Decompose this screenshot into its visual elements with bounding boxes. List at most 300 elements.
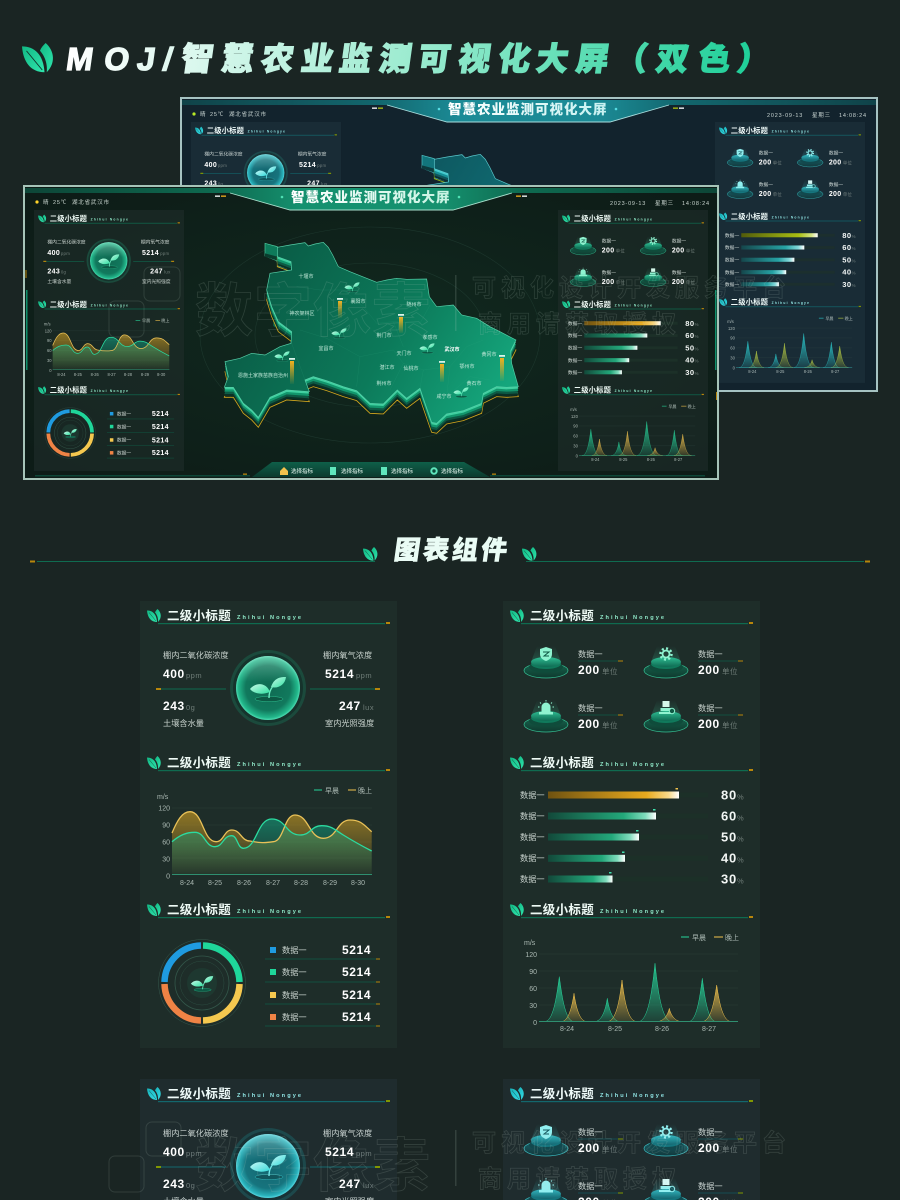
back right panel: 90	[730, 336, 736, 341]
sensor readings: 棚内氧气浓度	[323, 650, 372, 660]
map city labels: 黄冈市	[481, 351, 497, 358]
mini right panel: 二级小标题	[574, 214, 612, 223]
sensor readings: 400	[163, 667, 185, 681]
mini right panel: 数据一	[602, 238, 616, 245]
icon: title leaf	[22, 43, 53, 72]
map city labels: 荆门市	[376, 332, 392, 339]
dashboard preview: teal version behind	[181, 98, 877, 391]
metric values: 单位	[722, 666, 738, 676]
mini left panel: lux	[164, 270, 171, 275]
back right panel: Zhihui Nongye	[772, 130, 810, 134]
back right panel: %	[852, 246, 856, 251]
mini right panel: 数据一	[672, 238, 686, 245]
area chart: 8-27	[266, 880, 280, 887]
spike chart: 60	[529, 986, 537, 993]
back status bar: 25℃	[210, 111, 224, 118]
back right panel: 30	[730, 356, 736, 361]
panel: teal metrics: 200	[578, 1141, 600, 1155]
map city labels: 宜昌市	[318, 345, 334, 352]
mini left panel: 晚上	[161, 317, 169, 323]
mini right panel: 60	[573, 434, 579, 439]
panel: teal sensors: ppm	[186, 1149, 202, 1158]
mini left panel: 8-24	[57, 372, 66, 377]
back right panel: 8-27	[831, 369, 840, 374]
back right panel: 早晨	[825, 315, 833, 321]
map city labels: 孝感市	[422, 334, 438, 341]
back right panel: 二级小标题	[731, 298, 769, 307]
back right panel: 单位	[773, 191, 782, 198]
donut chart	[158, 940, 246, 1026]
title text: MOJ/智慧农业监测可视化大屏（双色）	[64, 41, 772, 77]
mini left panel: 8-28	[124, 372, 133, 377]
map city labels: 鄂州市	[459, 363, 475, 370]
mini right panel: 200	[672, 248, 685, 255]
back right panel	[715, 122, 865, 383]
metric values: 数据一	[578, 649, 603, 659]
back left panel: 243	[204, 181, 217, 188]
side accent bars	[26, 270, 717, 400]
back right panel: 120	[728, 326, 736, 331]
panel: teal sensors: lux	[363, 1181, 374, 1190]
back right panel: 数据一	[759, 150, 773, 157]
mini right panel: %	[695, 359, 699, 364]
map city labels: 神农架林区	[289, 310, 315, 317]
spike chart: 120	[525, 952, 537, 959]
mini left panel: 5214	[152, 437, 169, 444]
panel: teal sensors: 棚内氧气浓度	[323, 1128, 372, 1138]
status bar: weather and date: 湖北省武汉市	[72, 198, 110, 206]
metric values: 200	[578, 663, 600, 677]
bar chart: 数据一	[520, 853, 545, 863]
mini right panel: 0	[576, 453, 579, 458]
mini left panel: Zhihui Nongye	[91, 218, 129, 222]
panel: teal sensors: 400	[163, 1145, 185, 1159]
heading: wind chart: Zhihui Nongye	[237, 762, 303, 768]
back right panel: 60	[730, 346, 736, 351]
back left panel: ppm	[218, 163, 227, 168]
back right panel: 30	[842, 280, 852, 289]
area chart	[157, 786, 372, 887]
area chart: 30	[162, 856, 170, 864]
area chart: 8-26	[237, 880, 251, 887]
back right panel: %	[852, 234, 856, 239]
mini left panel: 土壤含水量	[47, 278, 71, 285]
sensor readings: 243	[163, 699, 185, 713]
mini left panel: 二级小标题	[50, 386, 88, 395]
back right panel: 200	[829, 191, 842, 198]
heading: bars	[510, 755, 753, 771]
section heading: chart components	[30, 535, 870, 565]
mini left panel: 5214	[152, 450, 169, 457]
mini right panel	[558, 210, 708, 471]
back left panel: 5214	[299, 162, 316, 169]
mini left panel: 室内光照强度	[142, 278, 171, 285]
back right panel: m/s	[727, 319, 734, 324]
heading: bars: Zhihui Nongye	[600, 762, 666, 768]
mini right panel: 8-25	[619, 457, 628, 462]
back right panel: 8-25	[776, 369, 785, 374]
mini right panel: 30	[573, 444, 579, 449]
back left panel: 棚内二氧化碳浓度	[204, 150, 243, 157]
sensor readings: 247	[339, 699, 361, 713]
heading: wind chart: 二级小标题	[167, 755, 231, 770]
panel: teal sensors: ppm	[356, 1149, 372, 1158]
watermark: top: 数字像素	[195, 279, 430, 344]
mini right panel: 数据一	[602, 269, 616, 276]
panel: teal sensors	[140, 1079, 397, 1200]
mini right panel: %	[695, 322, 699, 327]
bar chart: 50	[721, 830, 737, 844]
spike chart	[524, 933, 739, 1033]
heading: wind chart	[147, 755, 390, 771]
mini left panel	[34, 210, 184, 471]
panel: teal metrics: Zhihui Nongye	[600, 1093, 666, 1099]
mini left panel: 数据一	[117, 410, 131, 417]
back header band	[182, 100, 876, 122]
mini right panel: 40	[685, 356, 695, 365]
back header band: 智慧农业监测可视化大屏	[448, 101, 608, 117]
metric values: 200	[698, 663, 720, 677]
back right panel: 数据一	[725, 257, 739, 264]
bar chart: 数据一	[520, 874, 545, 884]
bar chart: %	[737, 834, 744, 844]
back right panel: 数据一	[725, 232, 739, 239]
mini left panel: 60	[47, 348, 52, 353]
heading: donut: 二级小标题	[167, 902, 231, 917]
back left panel: 棚内氧气浓度	[298, 150, 327, 157]
panel: teal metrics: 数据一	[698, 1181, 723, 1191]
heading: donut: Zhihui Nongye	[237, 909, 303, 915]
mini left panel: 5214	[152, 424, 169, 431]
back right panel: %	[852, 258, 856, 263]
panel: teal metrics	[503, 1079, 760, 1200]
back right panel: 二级小标题	[731, 212, 769, 221]
heading: metrics: 二级小标题	[530, 608, 594, 623]
donut legend: 5214	[342, 1010, 371, 1024]
bar chart	[520, 788, 744, 886]
mini right panel: 单位	[686, 279, 695, 286]
spike chart: 早晨	[692, 934, 706, 942]
metric values: 数据一	[698, 649, 723, 659]
panel: teal sensors: 247	[339, 1177, 361, 1191]
mini left panel: 5214	[152, 411, 169, 418]
heading: sensors: 二级小标题	[167, 608, 231, 623]
watermark: bottom	[109, 1122, 791, 1199]
mini right panel: m/s	[570, 407, 577, 412]
panel: teal metrics: 数据一	[578, 1181, 603, 1191]
area chart: 晚上	[358, 786, 372, 795]
back left panel: 二级小标题	[207, 126, 245, 135]
sensor readings: ppm	[356, 671, 372, 680]
mini right panel: 8-26	[647, 457, 656, 462]
back left panel: 247	[307, 181, 320, 188]
mini left panel: ppm	[160, 251, 170, 256]
metric values: 单位	[602, 666, 618, 676]
panel: teal metrics: 200	[698, 1141, 720, 1155]
bar chart: 数据一	[520, 811, 545, 821]
back right panel: 200	[829, 160, 842, 167]
map city labels: 荆州市	[376, 380, 392, 387]
section heading: chart components: 图表组件	[392, 535, 509, 565]
metric values: 200	[578, 717, 600, 731]
teal panels cropped at page bottom	[140, 1079, 760, 1200]
back right panel: 200	[759, 160, 772, 167]
spike chart: 8-27	[702, 1026, 716, 1033]
mini right panel: Zhihui Nongye	[615, 218, 653, 222]
area chart: 8-24	[180, 880, 194, 887]
metric values: 数据一	[698, 703, 723, 713]
mini right panel: 二级小标题	[574, 300, 612, 309]
sensor readings: 5214	[325, 667, 354, 681]
spike chart: 晚上	[725, 933, 739, 942]
back right panel: 数据一	[759, 181, 773, 188]
heading: bars: 二级小标题	[530, 755, 594, 770]
spike chart: 8-26	[655, 1026, 669, 1033]
back right panel: 60	[842, 243, 852, 252]
area chart: m/s	[157, 794, 169, 801]
mini left panel: 400	[47, 250, 60, 257]
bar chart: 60	[721, 808, 737, 824]
area chart: 8-30	[351, 880, 365, 887]
sensor readings: 0g	[186, 703, 195, 712]
back right panel: 200	[759, 191, 772, 198]
sensor readings: 棚内二氧化碳浓度	[163, 650, 229, 660]
mini right panel: %	[695, 371, 699, 376]
watermark: bottom: 可视化设计开发服务平台	[472, 1129, 791, 1157]
mini left panel: 5214	[142, 250, 159, 257]
area chart: 90	[162, 822, 170, 830]
heading: spikes: 二级小标题	[530, 902, 594, 917]
mini right panel: 8-27	[674, 457, 683, 462]
bar chart: %	[737, 856, 744, 864]
mini right panel: 数据一	[568, 320, 582, 327]
mini left panel: 0g	[61, 270, 67, 275]
mini right panel: 50	[685, 343, 695, 352]
donut legend: 数据一	[282, 967, 307, 977]
donut legend: 5214	[342, 988, 371, 1002]
status bar: weather and date	[35, 198, 710, 207]
donut legend: 5214	[342, 943, 371, 957]
status bar: weather and date: 星期三	[655, 200, 674, 207]
back right panel: 数据一	[725, 244, 739, 251]
back right panel: Zhihui Nongye	[772, 215, 810, 219]
back right panel: 单位	[773, 160, 782, 167]
heading: donut	[147, 902, 390, 918]
back right panel: 晚上	[845, 315, 853, 321]
panel: metrics, bars and spike chart	[503, 601, 760, 1048]
map city labels: 十堰市	[298, 273, 314, 280]
mini left panel: m/s	[44, 322, 51, 327]
mini right panel: 30	[685, 368, 695, 377]
mini left panel: 120	[45, 328, 52, 333]
area chart: 8-29	[323, 880, 337, 887]
spike chart: m/s	[524, 940, 536, 947]
panel: teal metrics: 数据一	[698, 1127, 723, 1137]
bottom navigation: 选择指标	[291, 467, 314, 475]
heading: sensors: Zhihui Nongye	[237, 615, 303, 621]
map sprout markers	[274, 282, 469, 398]
heading: metrics	[510, 608, 753, 624]
back right panel: 单位	[843, 160, 852, 167]
donut legend: 数据一	[282, 1012, 307, 1022]
area chart: 120	[158, 806, 170, 812]
spike chart: 90	[529, 969, 537, 976]
bar chart: %	[737, 876, 744, 886]
heading: spikes: Zhihui Nongye	[600, 909, 666, 915]
bottom navigation: 选择指标	[341, 467, 364, 475]
watermark: bottom: 数字像素	[195, 1134, 430, 1199]
sensor readings: lux	[363, 703, 374, 712]
mini left panel: Zhihui Nongye	[91, 303, 129, 307]
back right panel: %	[852, 283, 856, 288]
panel: teal metrics: 二级小标题	[530, 1086, 594, 1101]
screen title: 智慧农业监测可视化大屏	[291, 189, 450, 205]
mini left panel: 早晨	[142, 317, 150, 323]
panel: sensors, wind chart and donut	[140, 601, 397, 1048]
back right panel: 40	[842, 268, 852, 277]
panel: teal sensors: 243	[163, 1177, 185, 1191]
mini left panel: 8-27	[108, 372, 116, 377]
map city labels: 武汉市	[444, 346, 460, 353]
map city labels: 咸宁市	[436, 393, 452, 400]
mini left panel: 8-25	[74, 372, 83, 377]
map city labels	[238, 273, 497, 400]
bar chart: 30	[721, 872, 737, 886]
mini left panel: 0	[49, 368, 52, 373]
back right panel: 数据一	[829, 150, 843, 157]
back status bar: 2023-09-13	[767, 113, 803, 119]
bar chart: 数据一	[520, 832, 545, 842]
status bar: weather and date: 2023-09-13	[610, 201, 646, 207]
donut legend	[265, 943, 380, 1026]
spike chart: 0	[533, 1020, 537, 1027]
mini left panel: 8-26	[91, 372, 100, 377]
mini right panel: 数据一	[568, 332, 582, 339]
mini left panel: 90	[47, 338, 52, 343]
back right panel: %	[852, 271, 856, 276]
heading: sensors	[147, 608, 390, 624]
bottom navigation	[35, 462, 705, 477]
map city labels: 襄阳市	[350, 298, 366, 305]
back left panel: lux	[321, 182, 328, 187]
mini right panel: 200	[672, 279, 685, 286]
donut legend: 5214	[342, 965, 371, 979]
pedestal icons	[524, 646, 688, 732]
mini right panel: 120	[571, 414, 579, 419]
spike chart: 8-25	[608, 1026, 622, 1033]
mini right panel: 单位	[616, 279, 625, 286]
map city labels: 恩施土家族苗族自治州	[238, 372, 288, 379]
map data pillars	[289, 298, 505, 384]
map city labels: 天门市	[396, 350, 412, 357]
back status bar	[192, 110, 867, 119]
mini left panel: 30	[47, 358, 52, 363]
sensor readings: ppm	[186, 671, 202, 680]
back status bar: 星期三	[812, 112, 831, 119]
mini left panel: 247	[150, 269, 163, 276]
mini right panel: 数据一	[568, 345, 582, 352]
mini right panel: 单位	[616, 248, 625, 255]
metric values: 数据一	[578, 703, 603, 713]
back status bar: 湖北省武汉市	[229, 110, 267, 118]
area chart: 60	[162, 840, 170, 846]
area chart: 8-25	[208, 880, 222, 887]
mini right panel: 90	[573, 424, 579, 429]
back map	[381, 154, 675, 345]
back right panel: 0	[733, 365, 736, 370]
back screen frame	[181, 98, 877, 391]
mini right panel: 单位	[686, 248, 695, 255]
panel: teal sensors: 二级小标题	[167, 1086, 231, 1101]
main title	[22, 41, 772, 77]
status bar: weather and date: 14:08:24	[682, 201, 710, 207]
mini left panel: 243	[47, 269, 60, 276]
panel: teal sensors: Zhihui Nongye	[237, 1093, 303, 1099]
mini right panel: 数据一	[568, 369, 582, 376]
panel: teal sensors: 5214	[325, 1145, 354, 1159]
bottom navigation: 选择指标	[391, 467, 414, 475]
back status bar: 晴	[200, 110, 206, 118]
mini left panel: 数据一	[117, 437, 131, 444]
donut legend: 数据一	[282, 945, 307, 955]
area chart: 早晨	[325, 787, 339, 795]
mini left panel: 棚内二氧化碳浓度	[47, 238, 86, 245]
mini left panel: 棚内氧气浓度	[141, 238, 170, 245]
back left panel: Zhihui Nongye	[248, 130, 286, 134]
mini left panel: 二级小标题	[50, 300, 88, 309]
back right panel: 8-26	[804, 369, 813, 374]
panel: teal metrics: 单位	[602, 1144, 618, 1154]
mini left panel: ppm	[61, 251, 70, 256]
panel: teal metrics: 数据一	[578, 1127, 603, 1137]
back left panel: 0g	[218, 182, 224, 187]
area chart: 0	[166, 874, 170, 880]
mini right panel: Zhihui Nongye	[615, 389, 653, 393]
map city labels: 潜江市	[379, 364, 395, 371]
back left panel: 400	[204, 162, 217, 169]
mini left panel: 数据一	[117, 423, 131, 430]
back right panel: Zhihui Nongye	[772, 301, 810, 305]
metric values: 单位	[602, 720, 618, 730]
metric values: 单位	[722, 720, 738, 730]
mini left panel: 二级小标题	[50, 214, 88, 223]
metric values: 200	[698, 717, 720, 731]
donut legend: 数据一	[282, 990, 307, 1000]
mini right panel: 60	[685, 331, 695, 340]
sensor readings	[156, 650, 380, 728]
header band	[25, 188, 717, 210]
map city labels: 黄石市	[466, 380, 482, 387]
back right panel: 8-24	[748, 369, 757, 374]
mini left panel: 8-29	[141, 372, 150, 377]
map city labels: 仙桃市	[403, 365, 419, 372]
mini right panel: 80	[685, 319, 695, 328]
sensor readings: 室内光照强度	[325, 718, 374, 728]
back right panel: 80	[842, 231, 852, 240]
mini right panel: 200	[602, 279, 615, 286]
watermark: top: 商用请获取授权	[478, 311, 681, 338]
bar chart: 40	[721, 850, 737, 866]
mini right panel: 二级小标题	[574, 386, 612, 395]
area chart: 8-28	[294, 880, 308, 887]
mini right panel: %	[695, 334, 699, 339]
bar chart: 80	[721, 788, 737, 802]
mini right panel: %	[695, 346, 699, 351]
map city labels: 随州市	[406, 301, 422, 308]
dashboard preview: green version front	[24, 186, 718, 479]
mini left panel: 数据一	[117, 450, 131, 457]
mini right panel: 数据一	[672, 269, 686, 276]
